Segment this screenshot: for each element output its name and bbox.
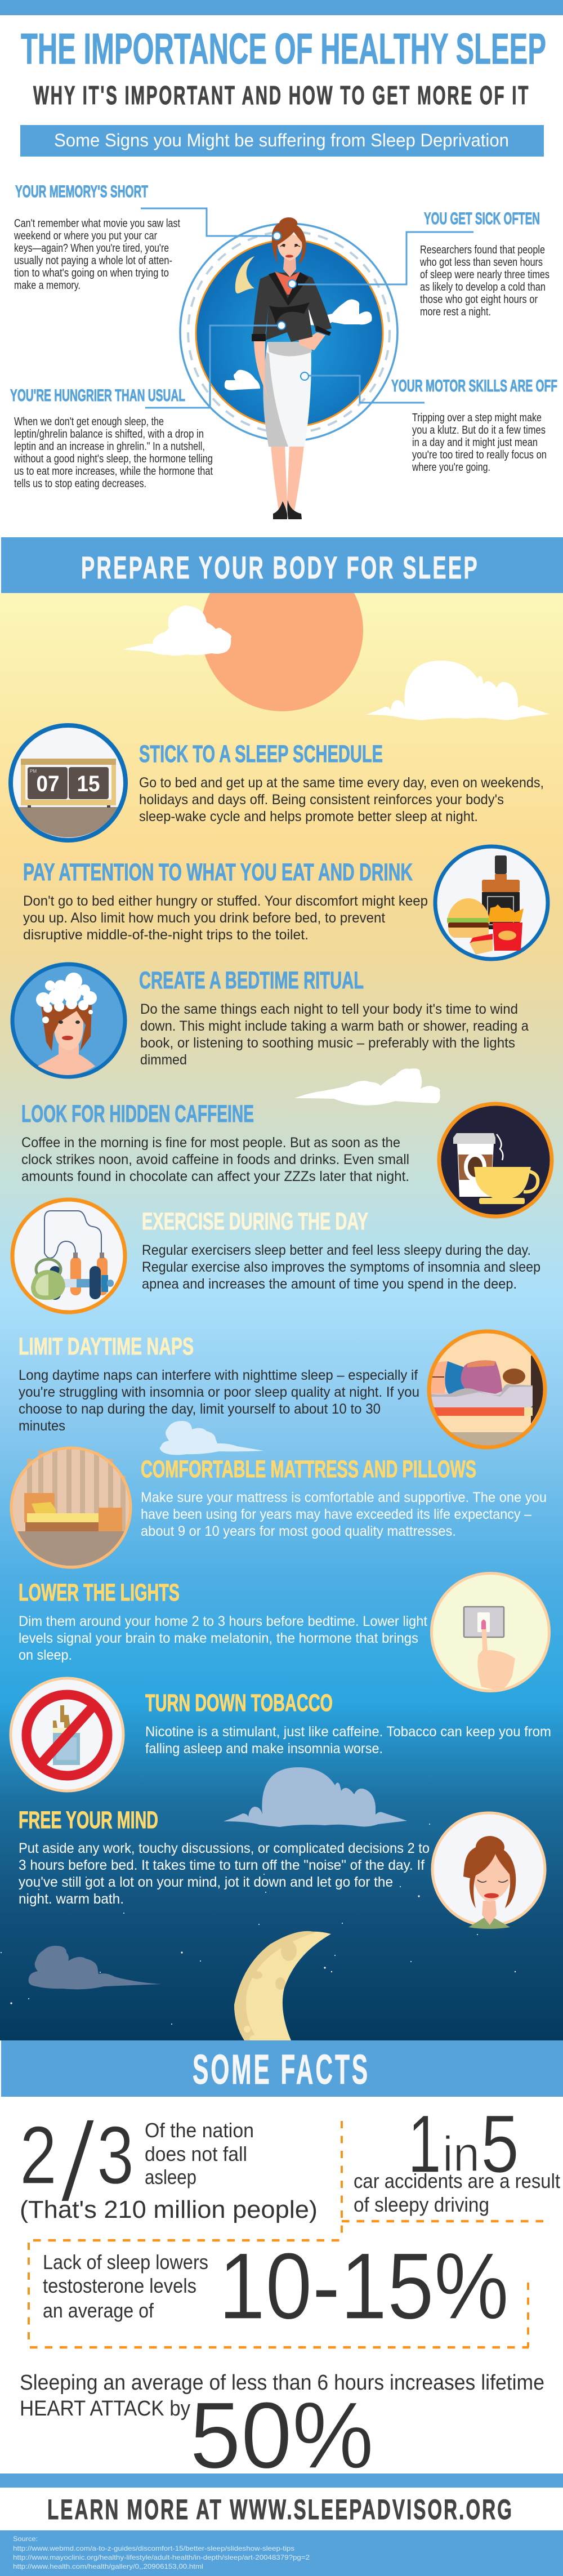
heading: YOU'RE HUNGRIER THAN USUAL (10, 386, 185, 405)
body text: you've still got a lot on your mind, jot it down and let go for the (19, 1874, 393, 1890)
tip: create a bedtime ritual (12, 964, 529, 1077)
body text: Regular exercise also improves the symptoms of insomnia and sleep (142, 1259, 540, 1275)
body text (142, 1242, 540, 1292)
description: does not fall (145, 2142, 247, 2165)
description: asleep (145, 2165, 196, 2189)
shoes (273, 500, 302, 519)
connector dot (278, 322, 285, 329)
body text: us to eat more increases, while the hormone that (14, 465, 213, 478)
body text (412, 412, 547, 474)
sources: http://www.webmd.com/a-to-z-guides/discomfort-15/better-sleep/slideshow-sleep-tips (13, 2544, 294, 2552)
tip: pay attention to what you eat and drink (23, 846, 548, 959)
connector line (309, 376, 425, 403)
body text (19, 1367, 419, 1434)
banner: some facts: SOME FACTS (193, 2046, 370, 2093)
banner: sleep deprivation signs (20, 125, 544, 157)
sky circle (180, 224, 397, 441)
body text: apnea and increases the amount of time you spend in the deep. (142, 1276, 517, 1292)
body text: When we don't get enough sleep, the (14, 416, 164, 428)
icon: woman with closed eyes (432, 1813, 545, 1929)
description: Of the nation (145, 2119, 254, 2142)
big number: 1 (408, 2098, 441, 2190)
body text: night. warm bath. (19, 1891, 124, 1907)
fact: testosterone (43, 2233, 509, 2339)
body text: Put aside any work, touchy discussions, or complicated decisions 2 to (19, 1840, 430, 1856)
description: Lack of sleep lowers (43, 2250, 208, 2274)
body text (19, 1614, 427, 1663)
big number: / (59, 2098, 97, 2226)
connector dot (288, 280, 296, 288)
cloud 2 (366, 661, 549, 720)
sources: http://www.mayoclinic.org/healthy-lifestyle/adult-health/in-depth/sleep/art-20048379?pg=2 (13, 2553, 310, 2561)
body text (23, 893, 428, 943)
body text: tells us to stop eating decreases. (14, 478, 146, 490)
banner: some facts (1, 2040, 563, 2097)
icon: finger on light switch (431, 1574, 549, 1691)
description: testosterone levels (43, 2274, 196, 2297)
description (20, 2119, 318, 2223)
body text: Coffee in the morning is fine for most people. But as soon as the (21, 1135, 400, 1151)
tip: limit daytime naps (19, 1331, 545, 1447)
description (354, 2169, 560, 2216)
body text (19, 1840, 430, 1907)
body text: holidays and days off. Being consistent reinforces your body's (139, 792, 504, 808)
blue divider bar (0, 2474, 563, 2488)
neck (283, 256, 296, 277)
head (272, 217, 306, 264)
tip: exercise during the day (12, 1200, 540, 1312)
body text: leptin/ghrelin balance is shifted, with a drop in (14, 428, 204, 440)
icon: woman with shampoo foam (12, 964, 125, 1077)
body text (139, 775, 544, 825)
body text: disruptive middle-of-the-night trips to the toilet. (23, 927, 309, 943)
body text: down. This might include taking a warm bath or shower, reading a (140, 1018, 529, 1034)
icon: bedroom (11, 1447, 131, 1567)
big number: 2 (20, 2109, 57, 2201)
icon: alarm clock: PM (30, 769, 37, 774)
icon: jump rope and weights (12, 1200, 125, 1312)
jacket (252, 272, 332, 342)
heading: TURN DOWN TOBACCO (145, 1690, 333, 1717)
body text: levels signal your brain to make melatonin, the hormone that brings (19, 1630, 418, 1646)
body text: about 9 or 10 years for most good quality mattresses. (141, 1523, 456, 1539)
heading: LOOK FOR HIDDEN CAFFEINE (21, 1100, 254, 1127)
cloud 3 (294, 1068, 440, 1106)
connector line (141, 208, 273, 236)
callout: your motor skills are off (301, 372, 557, 474)
fact: two thirds of the nation (20, 2098, 318, 2226)
body text: weekend or where you put your car (14, 230, 157, 242)
big number: 10-15% (218, 2233, 509, 2339)
cloud right (269, 300, 372, 326)
fact: heart attack (20, 2371, 544, 2488)
moon (234, 1931, 331, 2043)
connector line (298, 232, 473, 284)
description: HEART ATTACK by (20, 2397, 190, 2421)
body text: Can't remember what movie you saw last (14, 217, 180, 230)
body text: clock strikes noon, avoid caffeine in foods and drinks. Even small (21, 1152, 409, 1167)
heading: EXERCISE DURING THE DAY (142, 1208, 368, 1235)
connector dot (273, 232, 281, 240)
body text: Make sure your mattress is comfortable and supportive. The one you (141, 1490, 547, 1505)
cloud left (225, 370, 260, 390)
body text (145, 1724, 551, 1757)
icon: alarm clock (11, 725, 126, 840)
body text: keys—again? When you're tired, you're (14, 242, 169, 255)
sources (0, 2530, 563, 2576)
body text: Regular exercisers sleep better and feel less sleepy during the day. (142, 1242, 531, 1258)
body text: amounts found in chocolate can affect your ZZZs later that night. (21, 1169, 409, 1184)
body text: Nicotine is a stimulant, just like caffeine. Tobacco can keep you from (145, 1724, 551, 1740)
heading: FREE YOUR MIND (19, 1807, 158, 1834)
description (20, 2371, 544, 2421)
body text: Dim them around your home 2 to 3 hours before bedtime. Lower light (19, 1614, 427, 1629)
heading: CREATE A BEDTIME RITUAL (139, 967, 364, 994)
body text (141, 1490, 547, 1539)
collar (275, 271, 300, 295)
fact: one in five (354, 2098, 560, 2216)
big number (20, 2098, 134, 2226)
crescent moon (235, 256, 254, 293)
connector line (145, 326, 278, 408)
body text: where you're going. (412, 461, 490, 474)
heading: YOUR MEMORY'S SHORT (15, 182, 148, 201)
skirt (263, 342, 312, 447)
sources: Source: (13, 2535, 38, 2543)
tip: turn down tobacco (11, 1678, 551, 1791)
body text: Don't go to bed either hungry or stuffed. Your discomfort might keep (23, 893, 428, 909)
cloud 4 (160, 1421, 264, 1455)
sky gradient background (0, 593, 563, 2040)
arms (254, 332, 325, 403)
connector dot (301, 372, 309, 380)
callout: you get sick often (288, 210, 549, 318)
description (43, 2250, 208, 2322)
big number: in (443, 2126, 480, 2182)
icon: coffee cups (439, 1104, 552, 1216)
tip: lower the lights (19, 1574, 549, 1691)
body text: you up. Also limit how much you drink before bed, to prevent (23, 910, 385, 926)
heading: LOWER THE LIGHTS (19, 1579, 180, 1606)
body text: leptin and an increase in ghrelin." In a nutshell, (14, 440, 205, 453)
body text: falling asleep and make insomnia worse. (145, 1741, 383, 1757)
legs (271, 445, 304, 514)
icon: alarm clock: 15 (77, 772, 100, 796)
body text: dimmed (140, 1052, 187, 1068)
sources: http://www.health.com/health/gallery/0,,20906153,00.html (13, 2562, 203, 2570)
callout: your memory's short (14, 182, 281, 292)
icon: no smoking sign (11, 1678, 123, 1791)
body text: have been using for years may have exceeded its life expectancy – (141, 1507, 531, 1522)
tip: look for hidden caffeine (21, 1100, 552, 1216)
big number: 50% (190, 2382, 374, 2488)
illustration: tired woman in sky circle (180, 217, 397, 519)
description: an average of (43, 2299, 154, 2322)
tip: comfortable mattress and pillows (11, 1447, 547, 1567)
icon: alarm clock: 07 (36, 772, 60, 796)
body text: in a day and it might just mean (412, 436, 538, 449)
body text: book, or listening to soothing music – preferably with the lights (140, 1035, 515, 1051)
big number: 5 (481, 2098, 519, 2190)
body text (14, 217, 180, 292)
tip: stick to a sleep schedule (11, 725, 544, 840)
callout: you're hungrier than usual (10, 322, 285, 490)
body text: Do the same things each night to tell your body it's time to wind (140, 1001, 518, 1017)
body text: choose to nap during the day, limit yourself to about 10 to 30 (19, 1401, 381, 1417)
stars (1, 1824, 516, 2025)
body text: sleep-wake cycle and helps promote better sleep at night. (139, 809, 478, 825)
description: of sleepy driving (354, 2193, 489, 2216)
icon: person napping (429, 1331, 545, 1447)
top bar (0, 0, 563, 15)
description: (That's 210 million people) (20, 2196, 318, 2223)
icon: fast food and whiskey (435, 846, 548, 959)
body text (14, 416, 213, 490)
body text: 3 hours before bed. It takes time to turn off the "noise" of the day. If (19, 1857, 425, 1873)
sun (201, 593, 363, 711)
body text (140, 1001, 529, 1068)
cloud 5 (224, 1767, 407, 1827)
dashed dividers (29, 2121, 544, 2347)
body text (21, 1135, 409, 1184)
body text: Long daytime naps can interfere with nighttime sleep – especially if (19, 1367, 418, 1383)
body text: you're struggling with insomnia or poor sleep quality at night. If you (19, 1384, 419, 1400)
banner: sleep deprivation signs: Some Signs you Might be suffering from Sleep Deprivation (54, 130, 509, 150)
body text: minutes (19, 1418, 65, 1434)
heading: LIMIT DAYTIME NAPS (19, 1333, 194, 1360)
banner: prepare your body for sleep (1, 537, 563, 593)
body text: usually not paying a whole lot of atten- (14, 255, 172, 267)
heading: STICK TO A SLEEP SCHEDULE (139, 741, 383, 768)
big number (408, 2098, 519, 2190)
body text: those who got eight hours or (420, 293, 538, 306)
tip: free your mind (19, 1807, 545, 1929)
big number: 3 (97, 2109, 134, 2201)
body text (419, 244, 549, 318)
body text: tion to what's going on when trying to (14, 267, 169, 279)
body text: on sleep. (19, 1647, 72, 1663)
body text: make a memory. (14, 279, 81, 292)
body text: more rest a night. (420, 306, 491, 318)
cloud 1 (123, 605, 231, 656)
cloud 6 (29, 1946, 162, 1989)
body text: without a good night's sleep, the hormone telling (14, 453, 213, 465)
body text: Go to bed and get up at the same time every day, even on weekends, (139, 775, 544, 791)
